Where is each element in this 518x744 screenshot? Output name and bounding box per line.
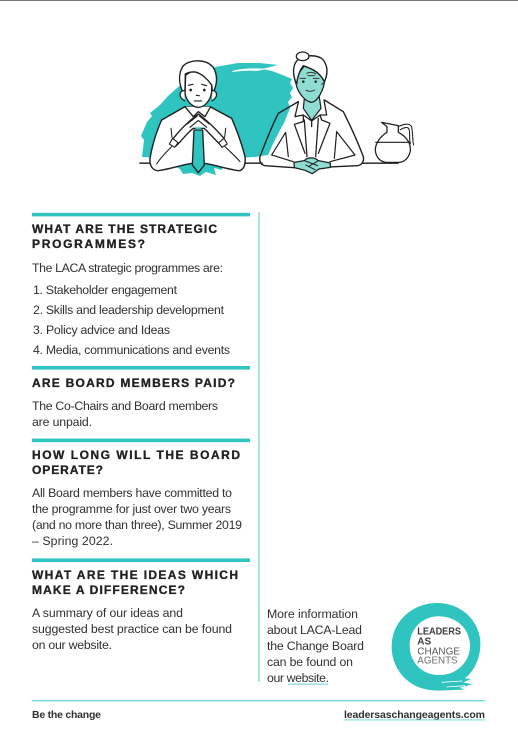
vertical divider <box>258 212 260 682</box>
body: how long: the programme for just over two years <box>32 502 231 516</box>
heading: ideas <box>32 568 238 597</box>
heading: strategic programmes: WHAT ARE THE STRATEGIC <box>32 222 217 236</box>
logo: leaders as change agents <box>392 603 480 691</box>
footer: website: leadersaschangeagents.com <box>344 709 485 721</box>
heading: strategic programmes <box>32 222 217 251</box>
body: ideas: A summary of our ideas and <box>32 606 183 620</box>
more information text: about LACA-Lead <box>267 623 362 637</box>
logo: leaders as change agents: AS <box>417 636 432 647</box>
body: ideas: suggested best practice can be found <box>32 622 232 636</box>
logo: leaders as change agents: LEADERS <box>417 626 461 637</box>
heading: how long: HOW LONG WILL THE BOARD <box>32 448 240 462</box>
panel: ideas <box>32 558 250 652</box>
intro text: The LACA strategic programmes are: <box>32 261 223 275</box>
table line <box>140 162 398 164</box>
body: paid <box>32 399 218 429</box>
illustration: board members at a table <box>140 52 414 176</box>
heading: paid: ARE BOARD MEMBERS PAID? <box>32 376 235 390</box>
heading: ideas: WHAT ARE THE IDEAS WHICH <box>32 568 238 582</box>
panel: how long <box>32 439 250 548</box>
footer: tagline: Be the change <box>32 709 101 721</box>
more information text <box>267 607 364 685</box>
woman <box>260 52 364 174</box>
panel: strategic programmes <box>32 213 250 357</box>
heading: how long <box>32 448 240 477</box>
body: paid: are unpaid. <box>32 415 92 429</box>
programme list: 4. Media, communications and events <box>33 343 230 357</box>
body: how long: All Board members have committed to <box>32 486 232 500</box>
programme list: 2. Skills and leadership development <box>33 303 225 317</box>
man <box>150 61 245 173</box>
programme list: 1. Stakeholder engagement <box>33 283 178 297</box>
body: how long: – Spring 2022. <box>32 534 113 548</box>
body: ideas <box>32 606 232 652</box>
footer line <box>32 700 485 701</box>
jug <box>375 122 414 162</box>
logo: leaders as change agents: CHANGE <box>417 646 460 657</box>
heading: ideas: MAKE A DIFFERENCE? <box>32 583 185 597</box>
body: ideas: on our website. <box>32 638 112 652</box>
body: how long: (and no more than three), Summer 2019 <box>32 518 242 532</box>
programme list <box>33 283 230 357</box>
programme list: 3. Policy advice and Ideas <box>33 323 170 337</box>
more information text: the Change Board <box>267 639 364 653</box>
heading: strategic programmes: PROGRAMMES? <box>32 237 145 251</box>
body: how long <box>32 486 242 548</box>
more information text: can be found on <box>267 655 353 669</box>
heading: how long: OPERATE? <box>32 463 103 477</box>
body: paid: The Co-Chairs and Board members <box>32 399 218 413</box>
panel: board members paid <box>32 366 250 429</box>
more information text: our website. <box>267 671 329 685</box>
teal brush stroke background <box>141 63 293 176</box>
more information text: More information <box>267 607 358 621</box>
logo: leaders as change agents: AGENTS <box>417 655 458 666</box>
